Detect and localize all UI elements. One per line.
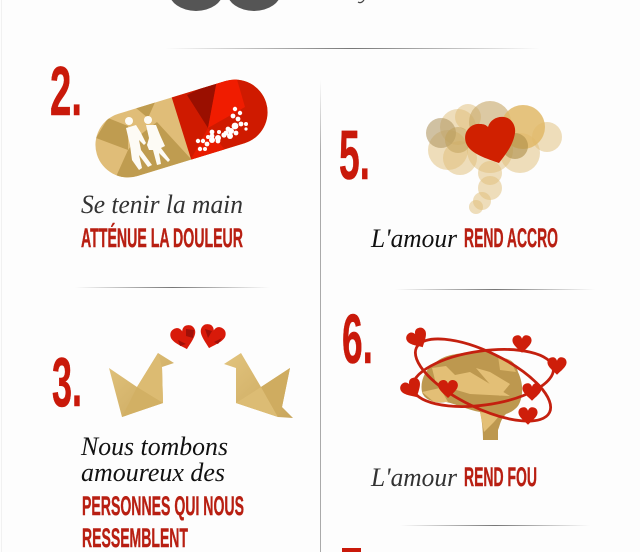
icon: pill with couple: [95, 80, 268, 178]
icon: left origami bird: [109, 353, 174, 417]
number 2: 2.: [50, 52, 82, 130]
caption 5 italic: L'amour: [370, 224, 458, 253]
section 5: [339, 101, 562, 253]
caption 3 italic: amoureux des: [81, 458, 225, 487]
section 3: [52, 323, 293, 552]
number 3: 3.: [52, 343, 82, 421]
icon: bubble brain with heart: [426, 101, 562, 214]
top icon: cropped dark shapes: [169, 0, 281, 11]
icon: heart: [465, 117, 515, 163]
icon: brain with orbiting hearts: [398, 322, 567, 440]
brain: [422, 351, 522, 440]
caption 3 italic: Nous tombons: [80, 432, 228, 461]
number 7 cropped: top bar: [342, 548, 361, 552]
caption 6 red: REND FOU: [464, 462, 537, 492]
orbits: [404, 322, 562, 438]
caption 3 red: PERSONNES QUI NOUS: [82, 491, 244, 521]
number 6: 6.: [342, 300, 373, 378]
icon: white particles: [196, 107, 248, 151]
caption 3 red: [82, 491, 244, 552]
caption 2 italic: Se tenir la main: [81, 190, 243, 219]
icon: two red hearts: [169, 323, 227, 352]
orbit hearts: [398, 326, 567, 425]
section 2: [51, 66, 268, 248]
number 5: 5.: [339, 116, 370, 194]
top text fragment: descender: [358, 0, 364, 3]
icon: couple silhouette: [125, 116, 170, 170]
caption 2 red: ATTÉNUE LA DOULEUR: [81, 222, 243, 253]
caption 3 italic: [80, 432, 228, 487]
icon: right origami bird: [224, 353, 293, 418]
section 6: [342, 300, 567, 492]
caption 6 italic: L'amour: [370, 463, 458, 492]
